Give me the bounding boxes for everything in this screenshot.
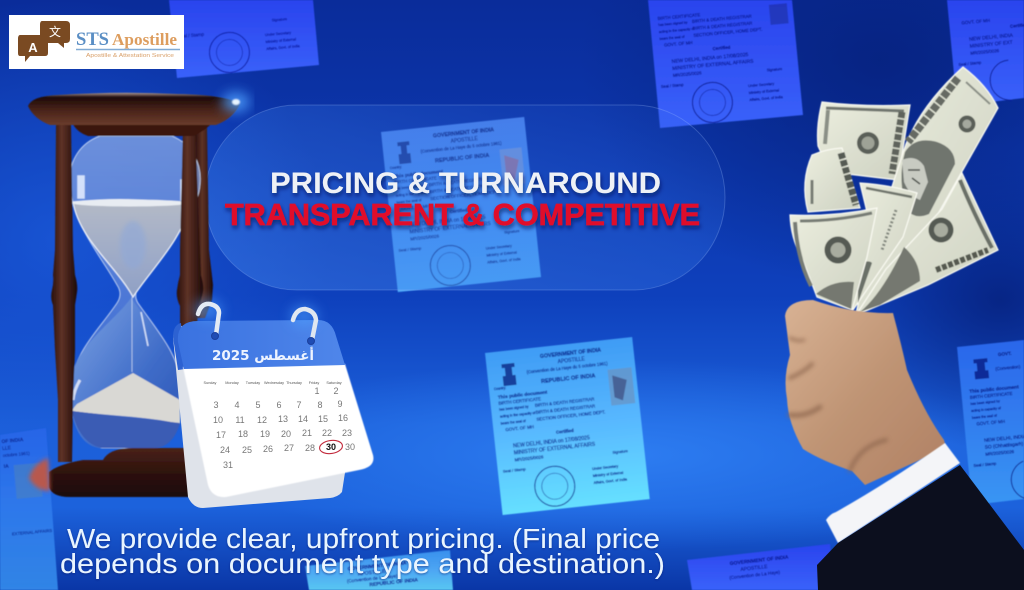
document: lower centre apostille (cyan): BIRTH & DEATH REGISTRAR	[535, 403, 595, 415]
document: lower centre apostille (cyan): MR/2025/0026	[514, 454, 544, 462]
document: bottom left apostille	[0, 428, 58, 590]
document: centre apostille behind panel: This public document	[393, 169, 444, 180]
document: top centre-right apostille: Under Secretary	[748, 82, 775, 88]
calendar left spine	[173, 323, 185, 370]
document: lower centre apostille (cyan): Seal / Stamp	[503, 466, 527, 474]
calendar weekday labels: Sunday	[204, 381, 217, 385]
document: top centre-right apostille: acting in the capacity of	[659, 27, 694, 34]
hourglass back post	[195, 125, 213, 318]
calendar dates: 24	[220, 445, 230, 455]
document: bottom centre apostille: APOSTILLE	[358, 569, 386, 577]
calendar page	[183, 364, 373, 497]
document: bottom centre apostille: REPUBLIC OF INDIA	[369, 577, 419, 588]
heading line 2: TRANSPARENT & COMPETITIVE	[225, 197, 700, 232]
document: right apostille: GOVT. OF MH	[976, 419, 1005, 426]
icon: hand holding money	[785, 300, 1024, 590]
document: centre apostille behind panel: Affairs, Govt. of India	[487, 257, 521, 265]
document: right apostille: acting in capacity of	[971, 406, 1001, 413]
document: bottom right apostille	[687, 544, 834, 590]
document: centre apostille behind panel: BIRTH & DEATH REGISTRAR	[429, 176, 489, 187]
calendar dates	[213, 386, 355, 470]
document: lower centre apostille (cyan): Signature	[612, 449, 628, 455]
document: lower centre apostille (cyan): Certified	[556, 428, 574, 435]
document: top right apostille: NEW DELHI, INDIA	[969, 33, 1014, 43]
calendar dates: 22	[322, 428, 332, 438]
calendar dates: 23	[342, 428, 352, 438]
bill front left	[790, 208, 877, 310]
calendar rings	[194, 299, 318, 344]
document: centre apostille behind panel: Seal / Stamp	[398, 245, 422, 253]
document: centre apostille behind panel: REPUBLIC OF INDIA	[435, 153, 490, 164]
portrait on bill	[901, 140, 955, 216]
document: lower centre apostille (cyan): BIRTH & DEATH REGISTRAR	[535, 396, 595, 408]
document: top right apostille: MR/2025/0026	[970, 48, 1000, 56]
document: lower centre apostille (cyan): has been signed by	[499, 405, 529, 412]
hourglass plate glow	[222, 92, 250, 112]
document: right apostille: SO (Chhattisgarh)	[985, 441, 1024, 451]
document: centre apostille behind panel: Country:	[390, 165, 402, 170]
document: lower centre apostille (cyan): REPUBLIC OF INDIA	[541, 373, 596, 385]
calendar dates: 27	[284, 443, 294, 453]
document: lower centre apostille (cyan): Country:	[494, 386, 506, 391]
caption line 2: depends on document type and destination.)	[60, 548, 665, 579]
document: lower centre apostille (cyan): Ministry of External	[593, 471, 624, 478]
hourglass upper sand	[73, 200, 189, 297]
document: bottom left apostille: EXTERNAL AFFAIRS	[12, 528, 52, 537]
document: lower centre apostille (cyan): Affairs, Govt. of India	[593, 477, 627, 485]
calendar weekday labels	[204, 381, 342, 385]
document: top right apostille	[947, 0, 1024, 106]
document: centre apostille behind panel: SECTION OFFICER, HOME DEPT.	[430, 189, 499, 201]
calendar dates: 26	[263, 444, 273, 454]
document: top left apostille: Under Secretary	[265, 31, 291, 37]
document: top centre-right apostille: SECTION OFFICER, HOME DEPT.	[693, 27, 763, 38]
document: centre apostille behind panel: Certified	[449, 207, 468, 214]
heading line 1: PRICING & TURNAROUND	[270, 167, 661, 200]
hourglass underside	[72, 122, 214, 136]
document: right apostille: This public document	[969, 384, 1019, 395]
hourglass glass bulbs	[70, 136, 200, 448]
logo tagline: Apostille & Attestation Service	[86, 53, 174, 59]
document: right apostille	[957, 340, 1024, 505]
document: top centre-right apostille	[648, 0, 803, 128]
hourglass left post	[51, 125, 77, 462]
calendar back pages	[173, 325, 350, 508]
document: top centre-right apostille: Certified	[712, 45, 731, 51]
calendar dates: 4	[234, 400, 240, 410]
document: centre apostille behind panel: GOVERNMENT OF INDIA	[433, 127, 495, 140]
document: top centre-right apostille: has been signed by	[658, 20, 688, 27]
calendar dates: 12	[257, 415, 267, 425]
calendar dates: 14	[298, 414, 308, 424]
document: bottom centre apostille: GOVERNMENT OF INDIA	[347, 560, 407, 573]
document: right apostille: BIRTH CERTIFICATE	[970, 391, 1013, 400]
calendar dates: 5	[255, 400, 261, 410]
document: lower centre apostille (cyan): bears the seal of	[501, 419, 526, 426]
document: centre apostille behind panel: bears the seal of	[396, 198, 422, 205]
document: top centre-right apostille: MR/2025/0026	[673, 70, 702, 78]
calendar month title: 2025 أغسطس	[212, 347, 314, 364]
calendar dates: 17	[216, 430, 226, 440]
document: lower centre apostille (cyan): BIRTH CERTIFICATE	[498, 396, 541, 406]
calendar dates: 19	[260, 429, 270, 439]
hourglass right post	[177, 125, 203, 330]
calendar dates: 10	[213, 415, 223, 425]
calendar dates: 20	[281, 429, 291, 439]
hourglass lower bulb	[71, 298, 179, 448]
document: centre apostille behind panel: MR/2025/0026	[410, 233, 440, 242]
bill right lower	[856, 173, 998, 315]
document: centre apostille behind panel: Ministry of External	[486, 250, 517, 258]
calendar dates: 2	[333, 386, 339, 396]
document: centre apostille behind panel: Signature	[504, 229, 520, 235]
document: lower centre apostille (cyan): APOSTILLE	[557, 356, 586, 365]
document: centre apostille behind panel: MINISTRY OF EXTERNAL AFFAIRS	[409, 221, 492, 236]
icon: calendar	[173, 299, 373, 508]
document: bottom left apostille: IA	[3, 463, 9, 470]
logo icon: speech bubbles: A	[28, 40, 38, 55]
document: lower centre apostille (cyan): (Convention de La Haye du 5 octobre 1961)	[526, 361, 608, 375]
shirt cuff	[826, 443, 960, 543]
document: centre apostille behind panel: BIRTH & DEATH REGISTRAR	[429, 183, 489, 194]
hourglass top plate	[28, 93, 240, 125]
calendar weekday labels: Wednesday	[264, 381, 284, 385]
document: centre apostille behind panel: (Convention de La Haye du 5 octobre 1961)	[420, 140, 502, 154]
calendar dates: 15	[318, 414, 328, 424]
document: bottom left apostille: LLE	[2, 445, 12, 452]
calendar dates: 16	[338, 413, 348, 423]
glass title panel	[205, 105, 725, 290]
document: right apostille: MR/2025/0026	[985, 449, 1015, 457]
logo icon: speech bubbles: 文	[49, 24, 61, 39]
calendar dates: 9	[337, 399, 343, 409]
bill tall diagonal	[856, 67, 998, 314]
calendar dates: 28	[305, 443, 315, 453]
icon: dollar bills	[790, 67, 998, 315]
document: right apostille: (Convention)	[995, 364, 1021, 371]
document: top centre-right apostille: MINISTRY OF EXTERNAL AFFAIRS	[672, 59, 754, 72]
calendar dates: 6	[276, 400, 282, 410]
document: lower centre apostille (cyan): NEW DELHI, INDIA on 17/08/2025	[513, 435, 590, 449]
calendar weekday labels: Saturday	[326, 381, 342, 385]
document: top right apostille: Seal / Stamp	[958, 60, 982, 67]
document: lower centre apostille (cyan)	[485, 337, 650, 515]
document: top left apostille: Seal / Stamp	[178, 32, 205, 39]
document: centre apostille behind panel: has been signed by	[395, 184, 425, 191]
document: centre apostille behind panel: BIRTH CERTIFICATE	[394, 175, 437, 185]
document: lower centre apostille (cyan): GOVERNMENT OF INDIA	[540, 347, 602, 360]
document: top centre-right apostille: bears the seal of	[659, 35, 685, 41]
document: centre apostille behind panel: acting in the capacity of	[396, 190, 431, 198]
document: right apostille: has been signed by	[970, 399, 1000, 406]
knuckle shading	[790, 338, 886, 470]
document: lower centre apostille (cyan): MINISTRY OF EXTERNAL AFFAIRS	[514, 442, 596, 456]
document: right apostille: Seal / Stamp	[973, 461, 997, 468]
document: bottom centre apostille: (Convention de La Haye)	[347, 573, 398, 584]
document: bottom right apostille: APOSTILLE	[740, 564, 769, 573]
document: top centre-right apostille: BIRTH CERTIFICATE	[657, 12, 700, 21]
caption line 1: We provide clear, upfront pricing. (Final price	[67, 523, 660, 554]
calendar dates: 13	[278, 414, 288, 424]
document: centre apostille behind panel: APOSTILLE	[450, 136, 479, 145]
document: top centre-right apostille: Seal / Stamp	[661, 82, 685, 89]
document: lower centre apostille (cyan): This public document	[498, 389, 548, 401]
calendar weekday labels: Friday	[309, 381, 319, 385]
document: right apostille: GOVT.	[998, 351, 1012, 357]
calendar dates: 8	[317, 400, 323, 410]
document: right apostille: bears the seal of	[972, 414, 997, 420]
document: centre apostille behind panel: Under Secretary	[486, 244, 512, 251]
calendar dates: 1	[314, 386, 320, 396]
document: bottom right apostille: GOVERNMENT OF INDIA	[729, 554, 789, 567]
icon: hourglass	[28, 92, 250, 497]
document: top right apostille: GOVT. OF MH	[961, 18, 990, 25]
calendar circled date	[319, 439, 343, 455]
document: bottom right apostille: (Convention de La Haye)	[729, 570, 781, 580]
calendar dates: 18	[238, 429, 248, 439]
document: top centre-right apostille: Signature	[767, 67, 782, 72]
calendar dates: 11	[235, 415, 245, 425]
document: centre apostille behind panel: GOVT. OF MH	[401, 203, 430, 211]
document: bottom left apostille: OF INDIA	[1, 437, 24, 445]
calendar dates: 31	[223, 460, 233, 470]
document: top centre-right apostille: GOVT. OF MH	[664, 40, 693, 48]
calendar dates: 3	[213, 400, 219, 410]
document: centre apostille behind panel	[381, 117, 541, 292]
document: top centre-right apostille: NEW DELHI, INDIA on 17/08/2025	[671, 52, 749, 65]
calendar weekday labels: Thursday	[286, 381, 302, 385]
hourglass red blot	[29, 458, 50, 491]
calendar dates: 25	[242, 445, 252, 455]
document: centre apostille behind panel: NEW DELHI, INDIA on 17/08/2025	[409, 215, 486, 229]
hourglass lower sand	[72, 373, 180, 424]
bill middle	[850, 183, 917, 310]
hourglass glass highlights	[78, 176, 186, 346]
jacket sleeve	[817, 465, 1024, 590]
document: top left apostille	[169, 0, 319, 78]
hourglass base	[49, 448, 215, 497]
calendar dates: 21	[302, 428, 312, 438]
calendar header	[178, 320, 345, 369]
document: top left apostille: Signature	[272, 17, 287, 22]
bill small left	[805, 148, 860, 212]
document: lower centre apostille (cyan): SECTION OFFICER, HOME DEPT.	[536, 409, 606, 422]
document: lower centre apostille (cyan): acting in the capacity of	[500, 411, 535, 419]
logo wordmark: STS	[76, 29, 109, 50]
document: lower centre apostille (cyan): GOVT. OF MH	[505, 424, 534, 432]
document: top left apostille: Ministry of External	[265, 37, 296, 44]
logo icon: speech bubbles	[18, 21, 70, 62]
document: top right apostille: MINISTRY OF EXT	[970, 40, 1013, 50]
logo	[9, 15, 184, 69]
calendar dates: 30	[326, 442, 336, 452]
bill top back	[818, 102, 910, 180]
calendar dates: 7	[296, 400, 302, 410]
logo: Apostille	[112, 30, 177, 49]
document: lower centre apostille (cyan): Under Secretary	[592, 464, 619, 471]
document: bottom centre apostille	[305, 550, 453, 590]
document: top centre-right apostille: BIRTH & DEATH REGISTRAR	[692, 14, 752, 24]
calendar weekday labels: Monday	[225, 381, 239, 385]
document: top left apostille: Affairs, Govt. of India	[266, 44, 300, 51]
document: top centre-right apostille: Ministry of External	[749, 88, 780, 95]
document: bottom left apostille: octobre 1961)	[2, 451, 30, 458]
document: top centre-right apostille: BIRTH & DEATH REGISTRAR	[692, 21, 753, 31]
calendar weekday labels: Tuesday	[246, 381, 260, 385]
fist	[785, 300, 946, 485]
document: top centre-right apostille: Affairs, Govt. of India	[749, 95, 783, 102]
calendar dates: 30	[345, 442, 355, 452]
